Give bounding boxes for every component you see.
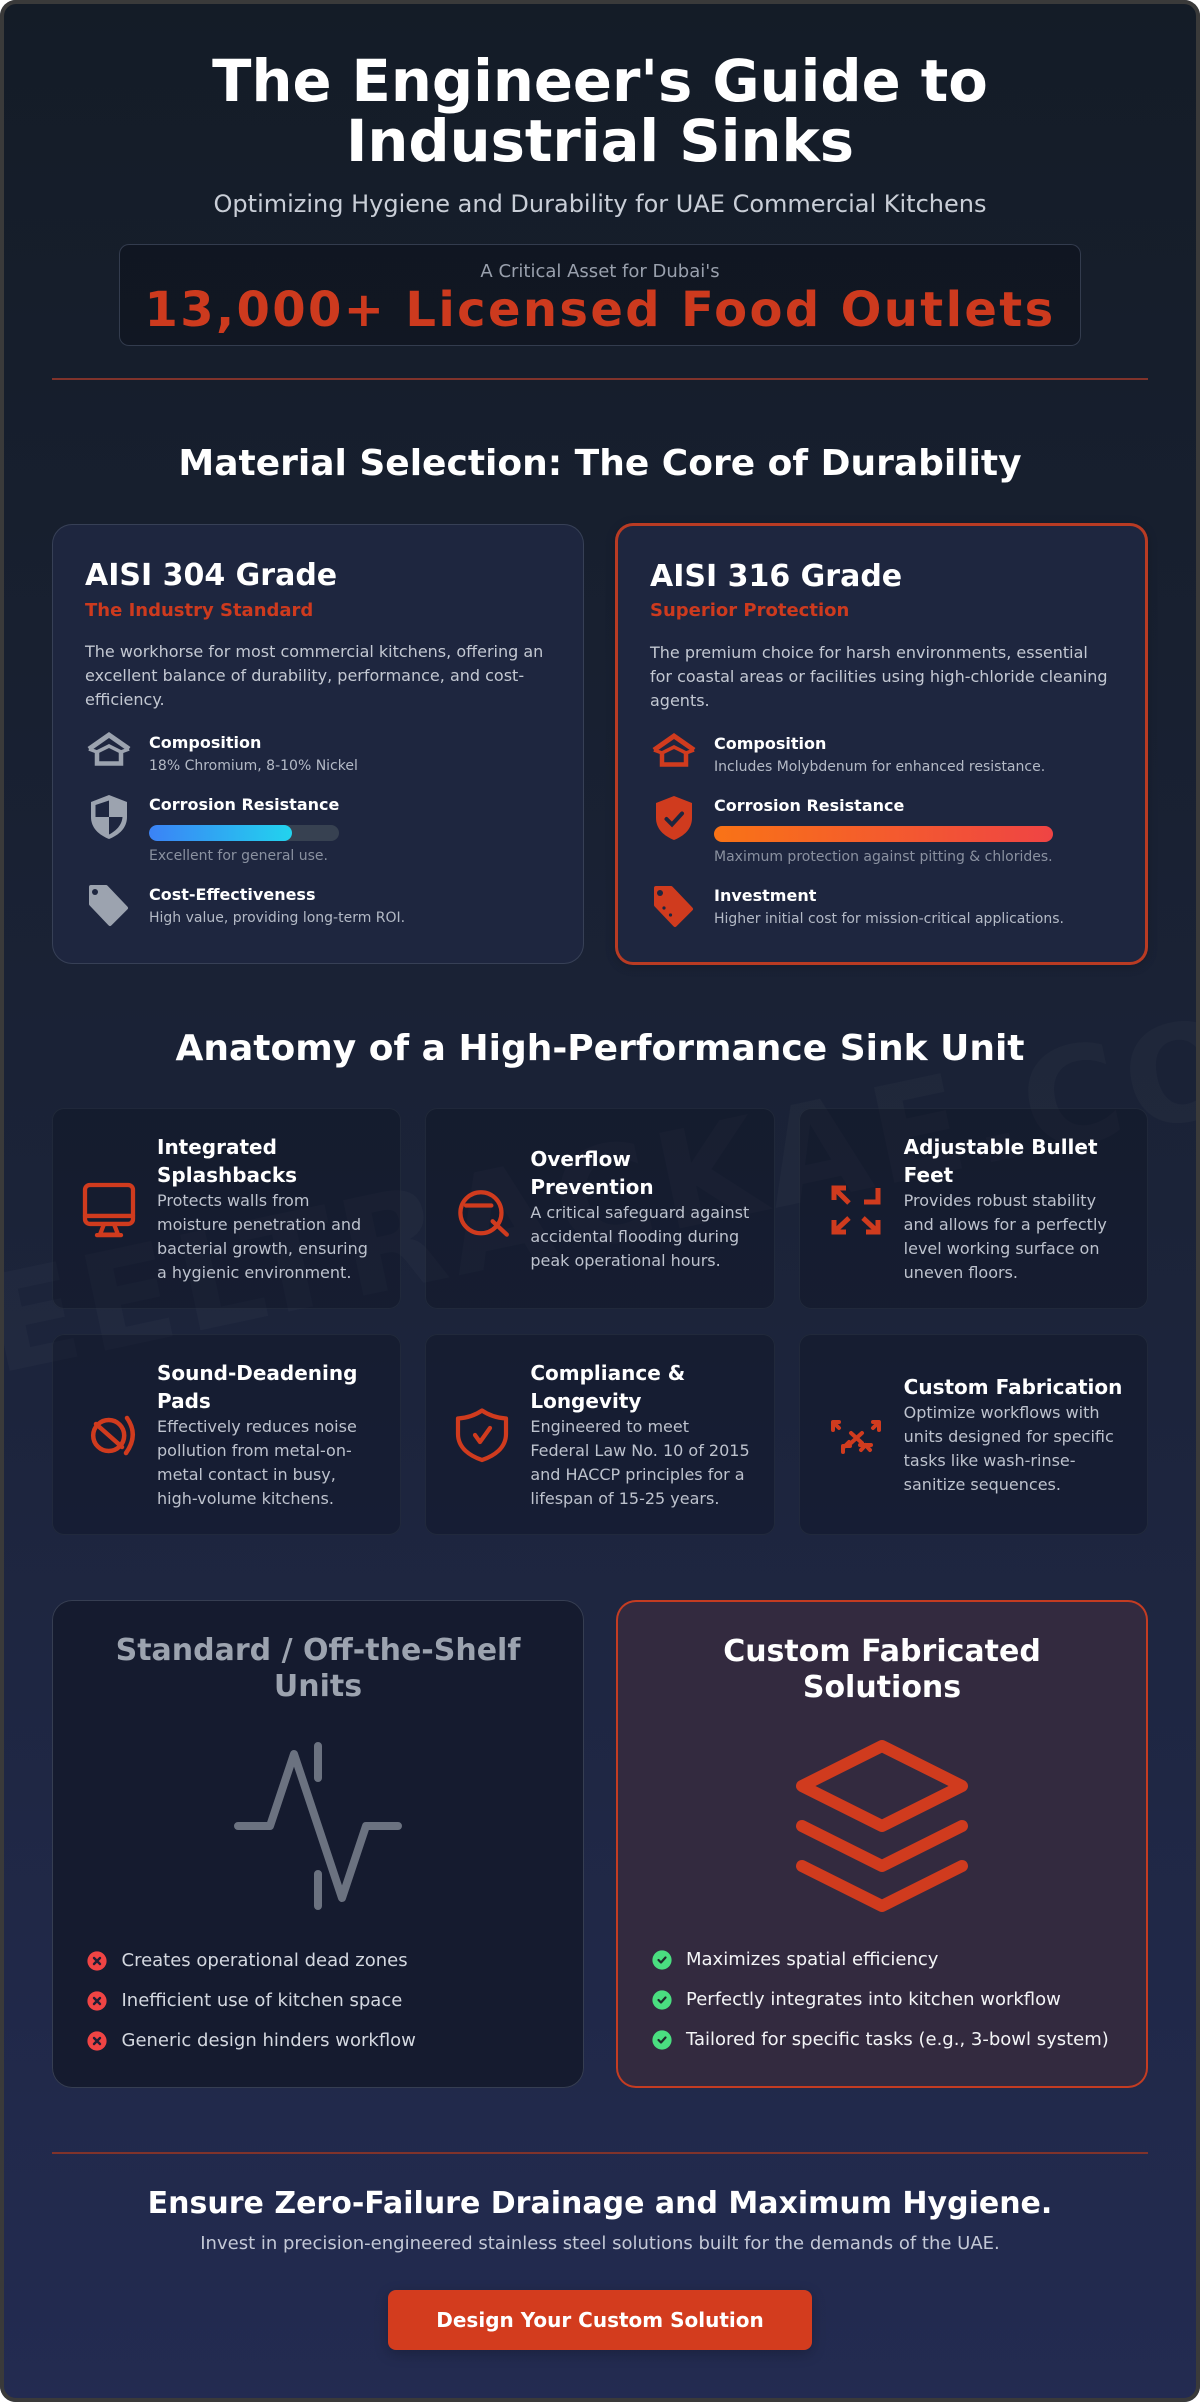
- drawback 1: Creates operational dead zones: [122, 1950, 408, 1971]
- feature text: a hygienic environment.: [157, 1262, 351, 1282]
- icon: half shield: [91, 795, 127, 839]
- feature: feet: [799, 1108, 1148, 1309]
- button: Design Your Custom Solution: [436, 2308, 764, 2332]
- feature title: Pads: [157, 1389, 211, 1413]
- icon: adjust arrows: [832, 1186, 880, 1234]
- feature: splashbacks: [52, 1108, 401, 1309]
- panel title: [116, 1633, 521, 1704]
- feature title: Compliance &: [530, 1361, 685, 1385]
- corrosion bar: [714, 826, 1053, 842]
- card description: The premium choice for harsh environments, essential: [650, 643, 1088, 662]
- feature title: [157, 1135, 297, 1187]
- cost text: High value, providing long-term ROI.: [149, 910, 405, 926]
- panel: AISI 304: [52, 524, 584, 964]
- stat callout: [119, 244, 1081, 346]
- card description: excellent balance of durability, performance, and cost-: [85, 666, 524, 685]
- card title: AISI 316 Grade: [650, 558, 902, 594]
- feature text: [904, 1190, 1107, 1282]
- panel: custom solutions: [616, 1600, 1148, 2088]
- feature title: [530, 1361, 685, 1413]
- feature text: metal contact in busy,: [157, 1464, 336, 1484]
- corrosion note: Maximum protection against pitting & chlorides.: [714, 849, 1053, 865]
- feature text: sanitize sequences.: [904, 1474, 1061, 1494]
- title: Industrial Sinks: [346, 108, 854, 175]
- card subtitle: Superior Protection: [650, 600, 849, 621]
- panel title: Standard / Off-the-Shelf: [116, 1633, 520, 1668]
- icon: workflow arrows: [831, 1420, 881, 1454]
- feature text: bacterial growth, ensuring: [157, 1238, 368, 1258]
- feature text: Protects walls from: [157, 1190, 309, 1210]
- footer: [148, 2186, 1052, 2354]
- feature text: peak operational hours.: [530, 1250, 721, 1270]
- feature text: Provides robust stability: [904, 1190, 1096, 1210]
- feature title: Adjustable Bullet: [904, 1135, 1098, 1159]
- panel title: Custom Fabricated: [723, 1634, 1041, 1669]
- feature title: [157, 1361, 357, 1413]
- benefit 2: Perfectly integrates into kitchen workflow: [686, 1989, 1061, 2010]
- panel title: [723, 1634, 1041, 1705]
- icon: check shield: [656, 796, 692, 840]
- drawback list: [87, 1950, 416, 2051]
- subtitle: Optimizing Hygiene and Durability for UAE Commercial Kitchens: [214, 190, 986, 218]
- card title: AISI 304 Grade: [85, 558, 337, 593]
- card description: agents.: [650, 691, 710, 710]
- card subtitle: The Industry Standard: [85, 600, 313, 621]
- corrosion bar: [149, 825, 339, 841]
- feature text: [157, 1190, 368, 1282]
- feature text: and HACCP principles for a: [530, 1464, 745, 1484]
- card description: [650, 643, 1108, 710]
- icon: muted sound: [90, 1416, 136, 1456]
- feature title: Custom Fabrication: [904, 1375, 1122, 1399]
- panel title: Solutions: [803, 1670, 961, 1705]
- feature text: level working surface on: [904, 1238, 1099, 1258]
- feature title: Integrated: [157, 1135, 277, 1159]
- corrosion label: Corrosion Resistance: [714, 796, 904, 814]
- feature text: Federal Law No. 10 of 2015: [530, 1440, 750, 1460]
- icon: layers: [796, 1740, 968, 1912]
- feature title: Feet: [904, 1163, 953, 1187]
- heading: material selection: Material Selection: The Core of Durability: [178, 443, 1022, 484]
- drawback 2: Inefficient use of kitchen space: [122, 1990, 402, 2011]
- feature text: and allows for a perfectly: [904, 1214, 1107, 1234]
- composition text: Includes Molybdenum for enhanced resistance.: [714, 759, 1045, 775]
- feature title: [530, 1147, 654, 1199]
- feature text: accidental flooding during: [530, 1226, 739, 1246]
- investment text: Higher initial cost for mission-critical applications.: [714, 911, 1064, 927]
- cost label: Cost-Effectiveness: [149, 885, 315, 904]
- feature title: Splashbacks: [157, 1163, 297, 1187]
- feature: compliance: [425, 1334, 775, 1535]
- feature text: A critical safeguard against: [530, 1202, 749, 1222]
- feature text: lifespan of 15-25 years.: [530, 1488, 719, 1508]
- icon: price tag: [89, 885, 128, 926]
- icon: pulse: [234, 1742, 402, 1910]
- feature: custom fabrication: [799, 1334, 1148, 1535]
- feature title: Prevention: [530, 1175, 654, 1199]
- investment label: Investment: [714, 886, 816, 905]
- icon: price tag: [654, 886, 694, 928]
- composition label: Composition: [149, 733, 261, 752]
- icon: compliance shield: [456, 1408, 508, 1462]
- feature text: Engineered to meet: [530, 1416, 689, 1436]
- feature text: [904, 1402, 1114, 1494]
- feature text: [530, 1202, 749, 1270]
- heading: anatomy: Anatomy of a High-Performance Sink Unit: [175, 1028, 1024, 1068]
- footer text: Invest in precision-engineered stainless steel solutions built for the demands of the UAE.: [200, 2233, 1000, 2254]
- panel: AISI 316: [615, 523, 1148, 965]
- composition text: 18% Chromium, 8-10% Nickel: [149, 758, 358, 774]
- header: [119, 48, 1081, 346]
- feature title: Sound-Deadening: [157, 1361, 357, 1385]
- feature text: pollution from metal-on-: [157, 1440, 352, 1460]
- feature text: units designed for specific: [904, 1426, 1114, 1446]
- feature title: Overflow: [530, 1147, 631, 1171]
- feature text: tasks like wash-rinse-: [904, 1450, 1076, 1470]
- feature text: Optimize workflows with: [904, 1402, 1100, 1422]
- panel title: Units: [274, 1669, 362, 1704]
- feature: pads: [52, 1334, 401, 1535]
- feature title: Longevity: [530, 1389, 641, 1413]
- composition label: Composition: [714, 734, 826, 753]
- feature title: [904, 1135, 1098, 1187]
- corrosion note: Excellent for general use.: [149, 848, 328, 864]
- title: The Engineer's Guide to: [212, 48, 988, 115]
- footer heading: Ensure Zero-Failure Drainage and Maximum Hygiene.: [148, 2186, 1052, 2221]
- corrosion label: Corrosion Resistance: [149, 794, 339, 814]
- card description: The workhorse for most commercial kitchens, offering an: [85, 642, 543, 661]
- card description: efficiency.: [85, 690, 165, 709]
- card description: [84, 642, 543, 709]
- title: [212, 48, 988, 175]
- icon: composition: [88, 732, 130, 766]
- feature text: [530, 1416, 750, 1508]
- feature text: uneven floors.: [904, 1262, 1018, 1282]
- benefit list: [652, 1949, 1109, 2050]
- benefit 3: Tailored for specific tasks (e.g., 3-bowl system): [686, 2029, 1109, 2050]
- feature: overflow: [425, 1108, 775, 1309]
- card description: for coastal areas or facilities using high-chloride cleaning: [650, 667, 1108, 686]
- benefit 1: Maximizes spatial efficiency: [686, 1949, 938, 1970]
- stat value: 13,000+ Licensed Food Outlets: [144, 282, 1056, 338]
- feature text: Effectively reduces noise: [157, 1416, 357, 1436]
- icon: monitor: [82, 1182, 136, 1238]
- button: [388, 2290, 812, 2350]
- stat label: A Critical Asset for Dubai's: [480, 261, 720, 282]
- icon: magnifier: [458, 1190, 509, 1237]
- drawback 3: Generic design hinders workflow: [122, 2030, 416, 2051]
- feature text: high-volume kitchens.: [157, 1488, 334, 1508]
- feature text: moisture penetration and: [157, 1214, 361, 1234]
- icon: composition: [652, 733, 696, 767]
- panel: standard units: [52, 1600, 584, 2088]
- feature text: [157, 1416, 357, 1508]
